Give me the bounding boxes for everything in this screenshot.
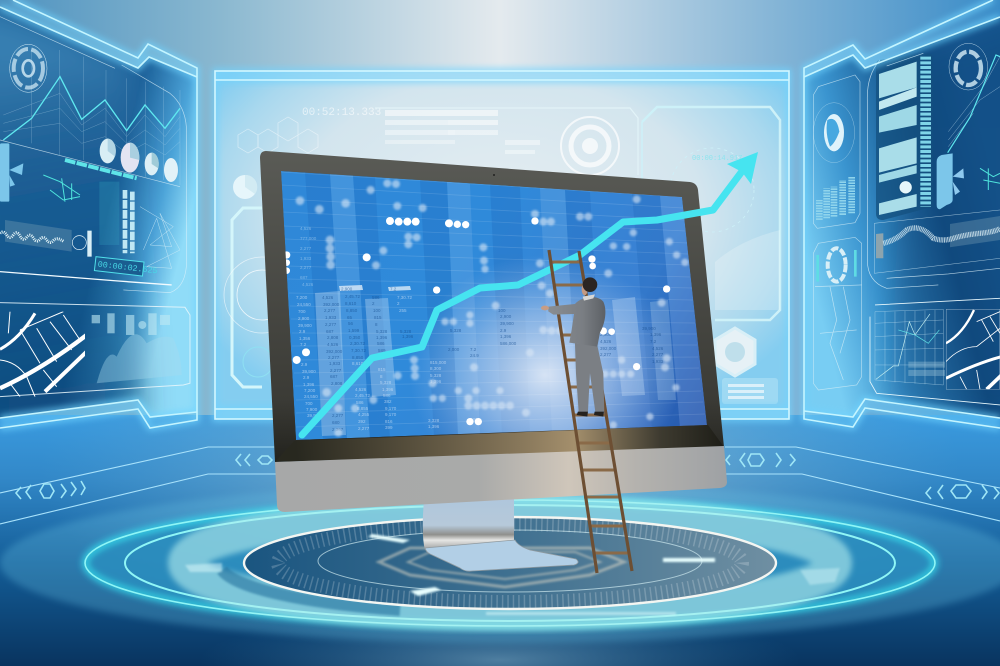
data bar block	[385, 110, 540, 154]
table figures: 65	[347, 315, 353, 320]
monitor	[260, 151, 727, 512]
line chart right	[948, 55, 1000, 153]
table figures: 2,277	[652, 352, 664, 357]
dial gauge	[10, 44, 47, 92]
cyan network map	[43, 175, 80, 202]
table figures: 1,396	[428, 424, 440, 429]
table figures: 777,000	[300, 236, 317, 241]
table figures: 8,610	[352, 361, 364, 366]
businessman	[541, 277, 605, 417]
table figures: 392,000	[326, 349, 343, 354]
collar	[583, 294, 595, 301]
table figures: 1,396	[650, 332, 662, 337]
bright table columns	[315, 291, 676, 436]
table figures: 255	[399, 308, 407, 313]
signal bars	[125, 190, 132, 253]
outer neon ring	[85, 500, 935, 626]
table figures: 2.9	[303, 375, 310, 380]
chin	[275, 446, 727, 512]
pale dots	[296, 179, 689, 437]
table figures: 815	[378, 367, 386, 372]
table figures: 1,356	[299, 336, 311, 341]
monitor screen spreadsheet	[281, 171, 707, 440]
table figures: 2,277	[325, 322, 337, 327]
spreadsheet columns	[305, 172, 680, 440]
table figures: 392	[358, 419, 366, 424]
table figures: 700	[305, 401, 313, 406]
table figures: 7,200	[296, 295, 308, 300]
street map right	[946, 309, 1000, 389]
thin inner ring	[318, 530, 702, 592]
table figures: 2.9	[299, 329, 306, 334]
table figures: 2,277	[300, 265, 312, 270]
table figures: 816	[385, 419, 393, 424]
camera dot	[493, 174, 495, 176]
neon frame: left panel	[0, 0, 197, 428]
outer neon glow	[85, 500, 935, 626]
panel: centre wall display	[215, 71, 789, 419]
table figures: 1,933	[329, 361, 341, 366]
second neon ring	[125, 505, 895, 621]
mountain chart	[97, 334, 182, 383]
table figures: 2,900	[341, 286, 353, 292]
table figures	[296, 226, 664, 432]
table figures: 586,000	[500, 341, 517, 346]
table figures: 815,000	[430, 360, 447, 365]
table figures: 382	[384, 399, 392, 404]
table figures: 2	[397, 301, 400, 306]
table figures: 687	[300, 275, 308, 280]
table figures: 586	[356, 400, 364, 405]
right timer readout: 00:00:14.917	[692, 155, 742, 163]
table figures: 56	[348, 321, 354, 326]
table figures: 2,277	[328, 355, 340, 360]
table figures: 2,808	[331, 381, 343, 386]
cyan noise column	[99, 182, 119, 245]
table figures: 100	[498, 308, 506, 313]
centre timer readout: 00:52:13.333	[302, 107, 381, 119]
table figures: 39,900	[642, 326, 656, 331]
screen base	[281, 171, 707, 440]
table figures: 2,277	[600, 352, 612, 357]
table figures: 589	[378, 348, 386, 353]
panel frame centre top	[375, 108, 638, 175]
table figures: 8	[375, 322, 378, 327]
table figures: 8,610	[345, 301, 357, 306]
panel: right wall display	[804, 10, 1000, 430]
table figures: 2,277	[300, 246, 312, 251]
table figures: 8	[380, 374, 383, 379]
table figures: 5,328	[400, 329, 412, 334]
neon frame: right panel	[804, 0, 1000, 428]
street map	[0, 312, 87, 397]
shoes	[577, 412, 604, 417]
monitor stand	[423, 495, 578, 571]
table figures: 5,328	[430, 373, 442, 378]
small bar card	[722, 378, 778, 404]
background wall	[0, 0, 1000, 430]
table figures: 2,277	[324, 308, 336, 313]
line chart series	[3, 77, 180, 140]
table figures: 4,255	[358, 412, 370, 417]
pie card right	[937, 153, 1000, 209]
table figures: 2,900	[298, 316, 310, 321]
holographic ring platform	[0, 483, 1000, 643]
globe card	[813, 75, 860, 228]
table figures: 5,328	[380, 380, 392, 385]
table figures: 5,328	[376, 329, 388, 334]
table figures: 7.2	[300, 342, 307, 347]
table figures: 39,900	[298, 323, 312, 328]
table figures: 9,170	[385, 406, 397, 411]
table figures: 1,396	[376, 335, 388, 340]
trousers	[575, 343, 604, 412]
table figures: 815	[374, 315, 382, 320]
table figures: 5,328	[450, 328, 462, 333]
table figures: 2,45.72	[355, 393, 371, 398]
table figures: 687	[330, 374, 338, 379]
network graph	[140, 207, 180, 268]
table figures: 680	[332, 420, 340, 425]
frame lines	[867, 53, 1000, 288]
table figures: 7.2	[390, 286, 397, 292]
table figures: 399	[385, 425, 393, 430]
lower bezel warm shade	[275, 425, 724, 462]
table figures: 586	[470, 417, 478, 422]
table figures: 2,808	[327, 335, 339, 340]
octagon frame left	[224, 208, 300, 387]
table figures: 4,526	[327, 342, 339, 347]
floor guide lines	[0, 447, 1000, 524]
city thumbnails	[92, 313, 170, 335]
bezel	[260, 151, 724, 462]
table figures: 1,933	[652, 359, 664, 364]
table figures: 100	[373, 308, 381, 313]
rising chart arrow	[302, 152, 758, 435]
table figures: 1,933	[300, 256, 312, 261]
table figures: 7.2	[470, 347, 477, 352]
panel: left wall display	[0, 0, 197, 430]
ladder rungs	[551, 262, 628, 553]
faint wave chart	[715, 230, 780, 310]
table figures: 39,900	[500, 321, 514, 326]
infographic card	[876, 53, 933, 220]
ladder rails	[549, 250, 632, 573]
bright light streaks	[185, 534, 840, 615]
table figures: 3,328	[428, 418, 440, 423]
table figures: 2,909	[600, 332, 612, 337]
hexagon pattern	[238, 117, 318, 153]
bright dots	[283, 217, 670, 425]
light cyan band	[185, 512, 835, 614]
table figures: 2,367	[332, 427, 344, 432]
neon frame: glow	[0, 0, 1000, 428]
table figures: 392,000	[600, 346, 617, 351]
stand neck	[423, 495, 514, 550]
table figures: 24,550	[304, 394, 318, 399]
grid chart card	[870, 298, 1000, 405]
table figures: 4,526	[300, 226, 312, 231]
neon frame: centre panel	[215, 71, 789, 419]
floor	[0, 415, 1000, 666]
table figures: 2.9	[500, 328, 507, 333]
table figures: 1,396	[500, 334, 512, 339]
table figures: 2	[372, 301, 375, 306]
table figures: 7,30.72	[397, 295, 413, 300]
hair	[583, 277, 597, 292]
jacket	[548, 297, 605, 347]
table figures: 4,526	[302, 282, 314, 287]
table figures: 1,396	[430, 379, 442, 384]
table figures: 7,200	[304, 388, 316, 393]
table figures: 700	[298, 309, 306, 314]
ladder	[549, 250, 632, 573]
table figures: 4,526	[322, 295, 334, 300]
table figures: 687	[326, 329, 334, 334]
inner disc	[244, 517, 776, 609]
table figures: 0,350	[349, 335, 361, 340]
octagon frame right	[642, 107, 780, 320]
table figures: 1,599	[348, 328, 360, 333]
table header cells	[339, 285, 411, 291]
table figures: 8,850	[352, 355, 364, 360]
table figures: 2,30.72	[350, 341, 366, 346]
outer halo	[0, 483, 1000, 643]
table figures: 2,45.72	[345, 294, 361, 299]
divider lines	[0, 17, 187, 293]
table figures: 9,170	[385, 412, 397, 417]
segmented cyan bar	[65, 160, 137, 178]
waveform strip	[874, 210, 1000, 273]
arrowhead	[727, 152, 758, 184]
table figures: 7,900	[306, 407, 318, 412]
table figures: 2,000	[448, 347, 460, 352]
table figures: 7.2	[650, 339, 657, 344]
table figures: 2.9	[301, 362, 308, 367]
light blue card	[0, 143, 9, 202]
face	[582, 283, 588, 295]
waveform card	[0, 220, 92, 257]
table figures: 4,526	[652, 346, 664, 351]
table figures: 392,000	[323, 302, 340, 307]
table figures: 8,300	[430, 366, 442, 371]
spreadsheet rows	[281, 172, 705, 427]
table figures: 39,9	[307, 413, 316, 418]
table figures: 4,526	[355, 387, 367, 392]
pie icon	[233, 175, 257, 199]
floor chevron icons	[16, 453, 999, 499]
table figures: 8,850	[346, 308, 358, 313]
target dial	[561, 117, 619, 175]
table figures: 2,277	[358, 426, 370, 431]
stand base	[425, 540, 578, 571]
white divider lines	[0, 272, 172, 285]
dark band	[222, 570, 400, 610]
radial tick ring	[278, 524, 742, 602]
globe hexagon	[715, 328, 755, 376]
radial burst	[9, 163, 23, 187]
line chart grid	[3, 50, 180, 185]
table figures: 24,550	[297, 302, 311, 307]
dial gauge right	[949, 43, 988, 90]
map card	[813, 237, 862, 390]
globe card bars	[819, 177, 852, 220]
table figures: 4,526	[600, 339, 612, 344]
table figures: 1,396	[382, 387, 394, 392]
timer box: 00:00:02.625	[97, 260, 158, 276]
table figures: 7,30.72	[351, 348, 367, 353]
table figures: 2,277	[332, 413, 344, 418]
table figures: 24.9	[470, 353, 479, 358]
table figures: 586	[377, 341, 385, 346]
table figures: 586	[372, 295, 380, 300]
white ring	[244, 517, 776, 609]
hexagon emblem	[379, 548, 624, 587]
hand	[541, 306, 549, 310]
pie charts	[100, 139, 178, 182]
table figures: 39,900	[302, 369, 316, 374]
table figures: 2,277	[330, 368, 342, 373]
table figures: 8,855	[357, 406, 369, 411]
table figures: 586	[383, 393, 391, 398]
table figures: 1,396	[303, 382, 315, 387]
centre glow	[418, 263, 669, 434]
table figures: 2,900	[500, 314, 512, 319]
table figures: 1,933	[325, 315, 337, 320]
table figures: 1,396	[402, 334, 414, 339]
